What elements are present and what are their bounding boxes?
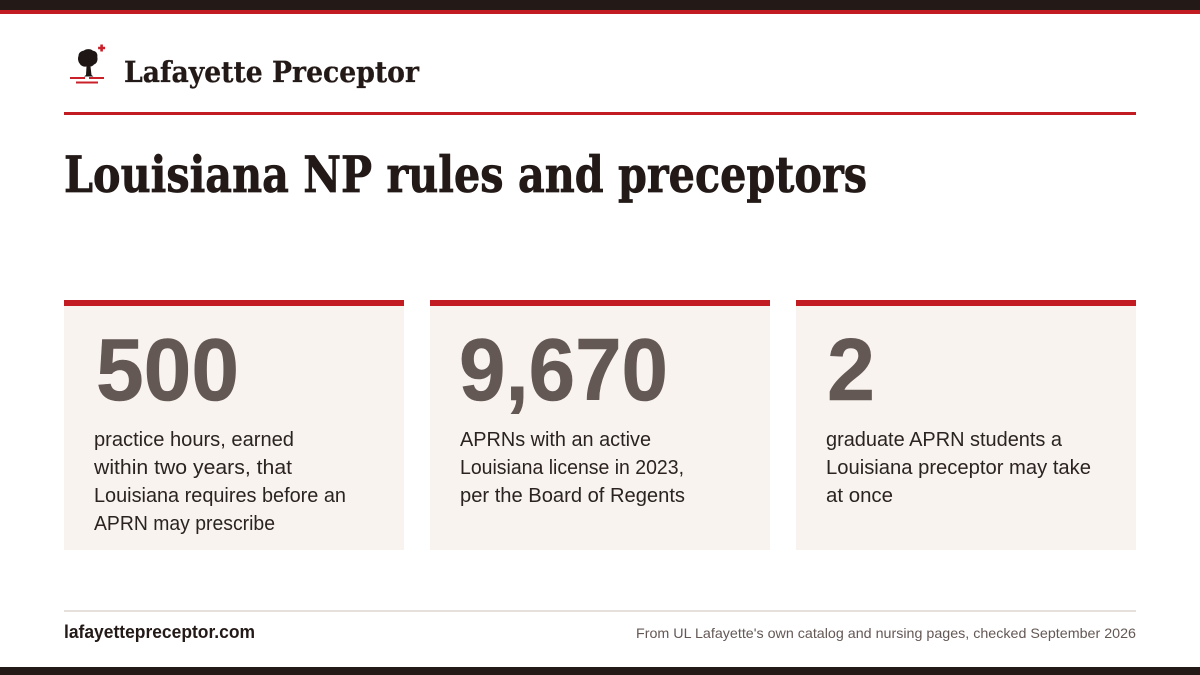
description: APRNs: APRNs with an active [460, 429, 651, 451]
stat: 500: 500 [96, 320, 239, 419]
description: practice hours: practice hours, earned [94, 429, 294, 451]
description: students: at once [826, 485, 893, 507]
brand name: Lafayette Preceptor [124, 55, 420, 89]
description: practice hours: within two years, that [93, 457, 292, 479]
bottom band [0, 667, 1200, 675]
description: practice hours: APRN may prescribe [94, 513, 275, 535]
stat: 2: 2 [827, 320, 875, 419]
footer source note: From UL Lafayette's own catalog and nursing pages, checked September 2026 [636, 625, 1136, 641]
description: APRNs: per the Board of Regents [460, 485, 685, 507]
header divider [64, 112, 1136, 115]
description: practice hours: Louisiana requires before an [94, 485, 346, 507]
description: students [826, 429, 1091, 507]
footer website: lafayettepreceptor.com [64, 622, 255, 642]
top band [0, 0, 1200, 14]
description: APRNs: Louisiana license in 2023, [460, 457, 684, 479]
panel: 2 students [796, 300, 1136, 550]
description: practice hours [93, 429, 346, 535]
description: APRNs [460, 429, 685, 507]
logo icon: oak tree with medical cross [70, 44, 105, 84]
title: Louisiana NP rules and preceptors [64, 145, 867, 204]
description: students: Louisiana preceptor may take [826, 457, 1091, 479]
panel: 500 practice hours [64, 300, 404, 550]
description: students: graduate APRN students a [826, 429, 1063, 451]
panel: 9,670 APRNs [430, 300, 770, 550]
stat: 9,670: 9,670 [459, 320, 668, 419]
